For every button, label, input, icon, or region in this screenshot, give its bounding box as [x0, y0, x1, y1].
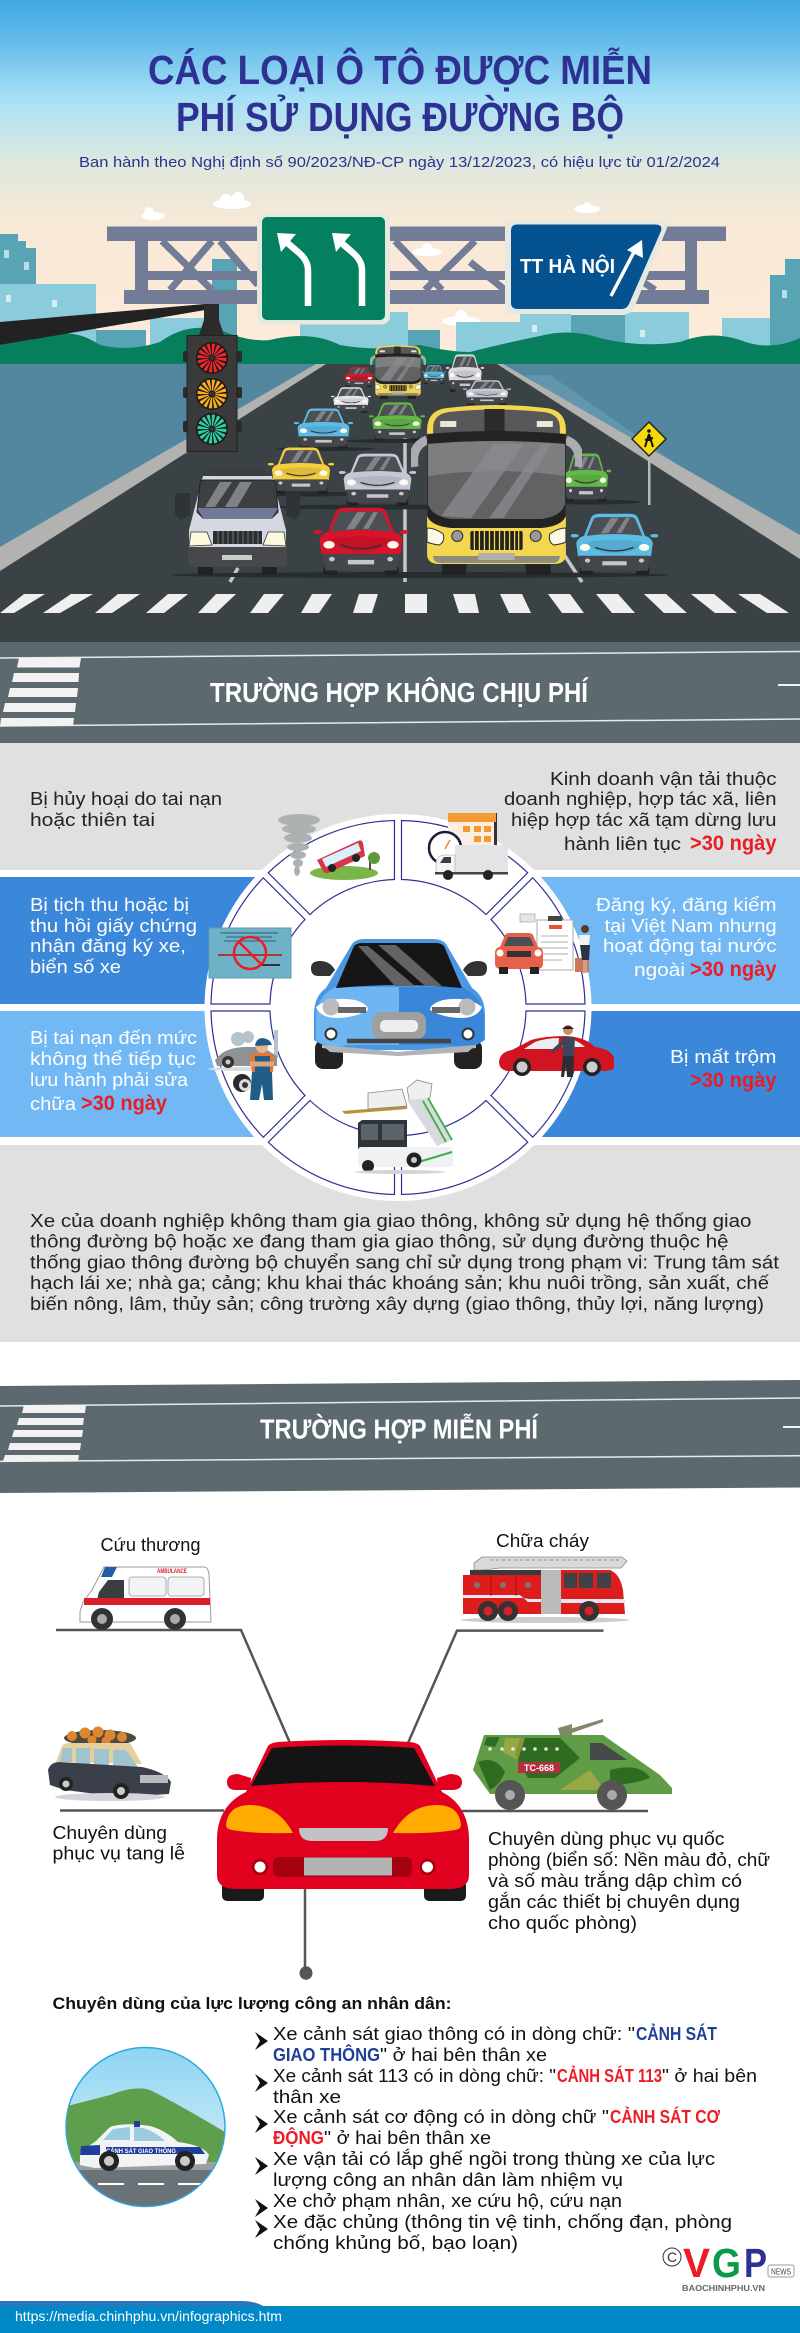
text block: mất trộm: Bị mất trộm: [670, 1046, 776, 1067]
section header: trường hợp miễn phí: [0, 1380, 800, 1493]
city skyline: [0, 234, 800, 364]
text block: tai nạn phải sửa chữa: [30, 1027, 197, 1115]
list: công an vehicles: Xe chở phạm nhân, xe cứu hộ, cứu nạn: [273, 2191, 622, 2211]
text block: quốc phòng: Chuyên dùng phục vụ quốc: [488, 1829, 724, 1849]
list: công an vehicles: Xe đặc chủng (thông tin vệ tinh, chống đạn, phòng: [273, 2212, 732, 2232]
text block: xe doanh nghiệp: Xe của doanh nghiệp không tham gia giao thông, không sử dụng hệ thống giao: [30, 1210, 752, 1231]
text block: hủy hoại: [30, 788, 222, 830]
road surroundings: [0, 364, 800, 614]
text block: quốc phòng: phòng (biển số: Nền màu đỏ, chữ: [488, 1850, 770, 1870]
list: công an vehicles: lượng công an nhân dân làm nhiệm vụ: [273, 2170, 623, 2190]
icon: ambulance: [80, 1567, 211, 1630]
text block: quốc phòng: gắn các thiết bị chuyên dụng: [488, 1891, 740, 1912]
icon: tornado and bus: [278, 814, 380, 880]
logo: VGP news: BAOCHINHPHU.VN: [682, 2284, 765, 2293]
white van: [175, 469, 300, 575]
central blue car: [311, 939, 487, 1069]
text block: tai nạn phải sửa chữa: Bị tai nạn đến mức: [30, 1027, 197, 1048]
title: PHÍ SỬ DỤNG ĐƯỜNG BỘ: [176, 94, 624, 140]
icon: airport stair vehicle: [342, 1080, 453, 1174]
footer bar: [0, 2301, 800, 2333]
text block: hoạt động tại nước ngoài: Đăng ký, đăng kiểm: [596, 894, 776, 915]
text block: hoạt động tại nước ngoài: >30 ngày: [690, 958, 777, 981]
list: công an vehicles: thân xe: [273, 2087, 341, 2107]
list: công an vehicles: " ở hai bên: [662, 2066, 757, 2086]
heading: công an nhân dân: Chuyên dùng của lực lượng công an nhân dân:: [52, 1994, 452, 2013]
icon: mechanic and damaged car: [208, 1030, 278, 1100]
green hills: [0, 328, 800, 364]
logo: VGP news: V: [683, 2240, 711, 2286]
footer bar: https://media.chinhphu.vn/infographics.htm: [15, 2308, 282, 2324]
icon: military vehicle: TC-668: [524, 1763, 554, 1773]
text block: tạm dừng kinh doanh: hành liên tục: [564, 833, 681, 854]
section header: trường hợp miễn phí: TRƯỜNG HỢP MIỄN PHÍ: [260, 1414, 539, 1444]
list: công an vehicles: CẢNH SÁT CƠ: [610, 2106, 721, 2127]
central red car: [217, 1740, 469, 1901]
text block: mất trộm: [670, 1046, 777, 1092]
road: [0, 364, 800, 642]
label: tang lễ: phục vụ tang lễ: [52, 1842, 185, 1864]
text block: xe doanh nghiệp: [30, 1210, 779, 1314]
traffic light arm: [0, 304, 205, 345]
blue direction sign: TT HÀ NỘI: [520, 254, 615, 278]
row backgrounds: [0, 743, 800, 1342]
section header: trường hợp không chịu phí: TRƯỜNG HỢP KHÔNG CHỊU PHÍ: [210, 676, 589, 708]
text block: mất trộm: >30 ngày: [690, 1069, 777, 1092]
title: [148, 47, 652, 140]
icon: ambulance: AMBULANCE: [157, 1569, 187, 1575]
text block: quốc phòng: và số màu trắng dập chìm có: [488, 1870, 742, 1891]
illustration: police car in circle: [60, 2048, 230, 2210]
logo: VGP news: C: [667, 2249, 677, 2265]
title: CÁC LOẠI Ô TÔ ĐƯỢC MIỄN: [148, 47, 652, 93]
label: cứu thương: Cứu thương: [100, 1535, 200, 1555]
text block: tai nạn phải sửa chữa: chữa: [30, 1093, 77, 1114]
text block: xe doanh nghiệp: biến nông, lâm, thủy sản; công trường xây dựng (giao thông, thủy lợi, năng lượng): [30, 1293, 764, 1314]
text block: quốc phòng: [488, 1829, 770, 1933]
connector dot: [300, 1966, 312, 1980]
text block: tịch thu giấy chứng nhận: Bị tịch thu hoặc bị: [30, 894, 189, 915]
label: tang lễ: Chuyên dùng: [52, 1823, 167, 1843]
icon: confiscated registration card: [209, 928, 291, 978]
car shadows: [170, 439, 670, 578]
text block: tạm dừng kinh doanh: hiệp hợp tác xã tạm dừng lưu: [511, 809, 776, 830]
list: công an vehicles: " ở hai bên thân xe: [380, 2045, 547, 2065]
list: công an vehicles: Xe vận tải có lắp ghế ngồi trong thùng xe của lực: [273, 2148, 715, 2169]
icon: fire truck: [461, 1557, 629, 1623]
list: công an vehicles: CẢNH SÁT 113: [557, 2065, 662, 2086]
central wheel: [174, 784, 622, 1231]
text block: tạm dừng kinh doanh: doanh nghiệp, hợp tác xã, liên: [504, 788, 776, 809]
text block: tai nạn phải sửa chữa: lưu hành phải sửa: [30, 1069, 189, 1090]
green direction sign: [257, 213, 390, 324]
sign gantry: [107, 226, 726, 304]
text block: quốc phòng: cho quốc phòng): [488, 1913, 637, 1933]
list: công an vehicles: Xe cảnh sát giao thông có in dòng chữ: ": [273, 2024, 635, 2044]
blue direction sign: [505, 220, 667, 314]
section header: trường hợp không chịu phí: [0, 642, 800, 743]
icon: truck with clock and calendar: [429, 813, 508, 880]
traffic light: [183, 304, 242, 452]
text block: hoạt động tại nước ngoài: hoạt động tại nước: [603, 935, 776, 956]
list: công an vehicles: CẢNH SÁT: [636, 2023, 717, 2044]
text block: tạm dừng kinh doanh: [504, 768, 777, 855]
traffic: cars and buses: [267, 345, 659, 575]
text block: hoạt động tại nước ngoài: tại Việt Nam nhưng: [605, 915, 777, 936]
text block: xe doanh nghiệp: thông đường bộ hoặc xe đang tham gia giao thông, sử dụng đường thuộc hệ: [30, 1230, 728, 1252]
list: công an vehicles: GIAO THÔNG: [273, 2044, 380, 2065]
lane lines: [230, 437, 582, 582]
text block: hoạt động tại nước ngoài: ngoài: [634, 959, 685, 980]
text block: tai nạn phải sửa chữa: >30 ngày: [81, 1092, 167, 1115]
hero background: sky: [0, 0, 800, 364]
icon: red car and thief: [499, 1025, 614, 1077]
connector lines: [56, 1630, 648, 1972]
label: chữa cháy: Chữa cháy: [496, 1531, 589, 1551]
logo: VGP news: [663, 2240, 794, 2293]
icon: registration with red suv: [495, 914, 590, 974]
text block: tịch thu giấy chứng nhận: [30, 894, 197, 977]
list: công an vehicles: Xe cảnh sát 113 có in dòng chữ: ": [273, 2066, 556, 2086]
text block: hủy hoại: Bị hủy hoại do tai nạn: [30, 788, 222, 809]
text block: tai nạn phải sửa chữa: không thể tiếp tục: [30, 1048, 196, 1069]
text block: hủy hoại: hoặc thiên tai: [30, 809, 155, 830]
text block: hoạt động tại nước ngoài: [596, 894, 777, 981]
list: công an vehicles: " ở hai bên thân xe: [324, 2128, 491, 2148]
list: công an vehicles: [255, 2023, 757, 2253]
pedestrian warning sign: [632, 422, 666, 505]
label: tang lễ: [52, 1823, 185, 1864]
icon: military vehicle: [473, 1719, 672, 1810]
text block: tạm dừng kinh doanh: Kinh doanh vận tải thuộc: [550, 768, 776, 789]
text block: tịch thu giấy chứng nhận: nhận đăng ký xe,: [30, 935, 186, 956]
logo: VGP news: P: [744, 2240, 767, 2286]
logo: VGP news: G: [712, 2240, 741, 2286]
illustration: police car in circle: CẢNH SÁT GIAO THÔNG: [106, 2146, 176, 2155]
text block: xe doanh nghiệp: thống giao thông đường bộ chuyển sang chỉ sử dụng trong phạm vi: Trung tâm sát: [30, 1252, 779, 1272]
text block: tịch thu giấy chứng nhận: biển số xe: [30, 956, 121, 977]
subtitle: Ban hành theo Nghị định số 90/2023/NĐ-CP ngày 13/12/2023, có hiệu lực từ 01/2/2024: [79, 154, 720, 171]
text block: xe doanh nghiệp: hạch lái xe; nhà ga; cảng; khu khai thác khoáng sản; khu nuôi trồng, sản xuất, chế: [30, 1272, 770, 1293]
list: công an vehicles: ĐỘNG: [273, 2127, 324, 2148]
clouds: [141, 192, 600, 326]
crosswalk: [0, 594, 789, 613]
icon: hearse: [48, 1726, 171, 1801]
text block: tịch thu giấy chứng nhận: thu hồi giấy chứng: [30, 915, 197, 936]
list: công an vehicles: chống khủng bố, bạo loạn): [273, 2233, 518, 2253]
list: công an vehicles: Xe cảnh sát cơ động có in dòng chữ ": [273, 2107, 609, 2127]
text block: tạm dừng kinh doanh: >30 ngày: [690, 832, 777, 855]
logo: VGP news: NEWS: [771, 2268, 791, 2276]
